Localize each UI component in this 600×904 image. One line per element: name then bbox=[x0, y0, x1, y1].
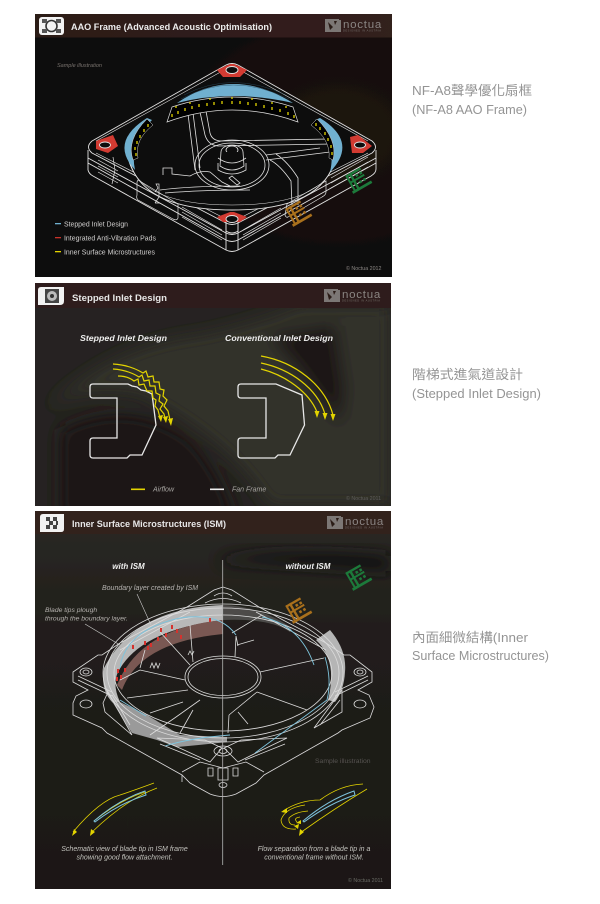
illustration: fan frame bbox=[88, 64, 376, 252]
copyright: AAO frame: © Noctua 2012 bbox=[346, 265, 381, 272]
side text: AAO frame: NF-A8聲學優化扇框 bbox=[412, 83, 532, 98]
divider: with / without bbox=[222, 560, 224, 865]
callout: blade tips bbox=[45, 607, 128, 645]
watermark: panel 3 bbox=[283, 563, 372, 624]
label: with ISM: with ISM bbox=[112, 562, 145, 571]
fan blades bbox=[120, 615, 324, 735]
heading: ISM: Inner Surface Microstructures (ISM) bbox=[72, 519, 226, 529]
frame outline bbox=[88, 64, 376, 252]
stators and hub bbox=[160, 111, 332, 205]
blue stepped inlet bbox=[124, 82, 342, 172]
diagram: attached flow bbox=[72, 783, 157, 836]
icon: ISM badge bbox=[40, 514, 64, 532]
red vibration pads bbox=[96, 64, 372, 233]
side text: ISM bbox=[412, 630, 549, 663]
caption: without ISM: Flow separation from a blade tip in a bbox=[258, 846, 371, 853]
heading: AAO frame: AAO Frame (Advanced Acoustic Optimisation) bbox=[71, 22, 272, 32]
panel header: stepped inlet bbox=[35, 283, 391, 308]
panel header: AAO frame bbox=[35, 14, 392, 38]
logo: noctua bbox=[324, 289, 381, 302]
copyright: stepped inlet: © Noctua 2011 bbox=[346, 495, 381, 502]
side text: stepped inlet: (Stepped Inlet Design) bbox=[412, 386, 541, 401]
callout: blade tips: Blade tips plough bbox=[45, 607, 97, 614]
icon: fan badge bbox=[38, 287, 64, 305]
legend: stepped inlet bbox=[131, 486, 266, 494]
side text: ISM: Surface Microstructures) bbox=[412, 648, 549, 663]
watermark: panel 1 bbox=[283, 166, 372, 227]
subheading: stepped: Stepped Inlet Design bbox=[80, 333, 167, 343]
diagram: separated flow bbox=[281, 784, 367, 836]
side text: stepped inlet: 階梯式進氣道設計 bbox=[412, 367, 523, 382]
panel: AAO frame bbox=[35, 14, 392, 277]
background dark smear bbox=[220, 551, 391, 572]
callout: blade tips: through the boundary layer. bbox=[45, 616, 128, 622]
note: sample illustration: Sample illustration bbox=[315, 758, 371, 765]
callout: boundary layer bbox=[102, 585, 198, 625]
panel: ISM bbox=[35, 511, 391, 889]
yellow microstructures bbox=[131, 97, 334, 160]
icon: AAO badge bbox=[39, 17, 64, 35]
background photo shapes bbox=[54, 308, 390, 506]
blue blade tips bbox=[120, 617, 329, 753]
logo: noctua bbox=[325, 19, 382, 32]
side text: AAO frame: (NF-A8 AAO Frame) bbox=[412, 102, 527, 117]
red microstructures bbox=[116, 618, 211, 681]
diagram: stepped frame profile bbox=[90, 384, 156, 458]
legend: stepped inlet: Airflow bbox=[152, 486, 175, 494]
panel header: ISM bbox=[35, 511, 391, 534]
vents on frame side bbox=[98, 157, 368, 240]
ring shading bbox=[103, 605, 345, 747]
copyright: ISM: © Noctua 2011 bbox=[348, 877, 383, 884]
diagram: stepped airflow arrows bbox=[113, 364, 173, 426]
caption: with ISM: showing good flow attachment. bbox=[76, 854, 173, 862]
panel: stepped inlet bbox=[35, 283, 391, 520]
legend: AAO frame bbox=[55, 222, 156, 256]
subheading: conventional: Conventional Inlet Design bbox=[225, 333, 333, 343]
legend: AAO frame: Integrated Anti-Vibration Pads bbox=[64, 236, 156, 242]
note: sample illustration: Sample illustration bbox=[57, 63, 102, 69]
callout: boundary layer: Boundary layer created by ISM bbox=[102, 585, 198, 592]
side text: ISM: 內面細微結構(Inner bbox=[412, 630, 529, 645]
label: without ISM: without ISM bbox=[286, 562, 331, 571]
caption: with ISM bbox=[61, 846, 188, 862]
caption: without ISM bbox=[258, 846, 371, 862]
illustration: ISM fan bbox=[73, 587, 374, 796]
caption: without ISM: conventional frame without ISM. bbox=[264, 854, 364, 862]
caption: with ISM: Schematic view of blade tip in ISM frame bbox=[61, 846, 188, 853]
fan frame outline bbox=[73, 587, 374, 796]
heading: stepped inlet: Stepped Inlet Design bbox=[72, 293, 167, 303]
diagram: conventional airflow arrows bbox=[261, 356, 336, 421]
legend: stepped inlet: Fan Frame bbox=[232, 486, 266, 494]
diagram: conventional frame profile bbox=[238, 384, 304, 458]
legend: AAO frame: Stepped Inlet Design bbox=[64, 222, 128, 228]
legend: AAO frame: Inner Surface Microstructures bbox=[64, 250, 155, 256]
side text: AAO frame bbox=[412, 83, 532, 117]
side text: stepped inlet bbox=[412, 367, 541, 401]
logo: noctua bbox=[327, 516, 384, 530]
